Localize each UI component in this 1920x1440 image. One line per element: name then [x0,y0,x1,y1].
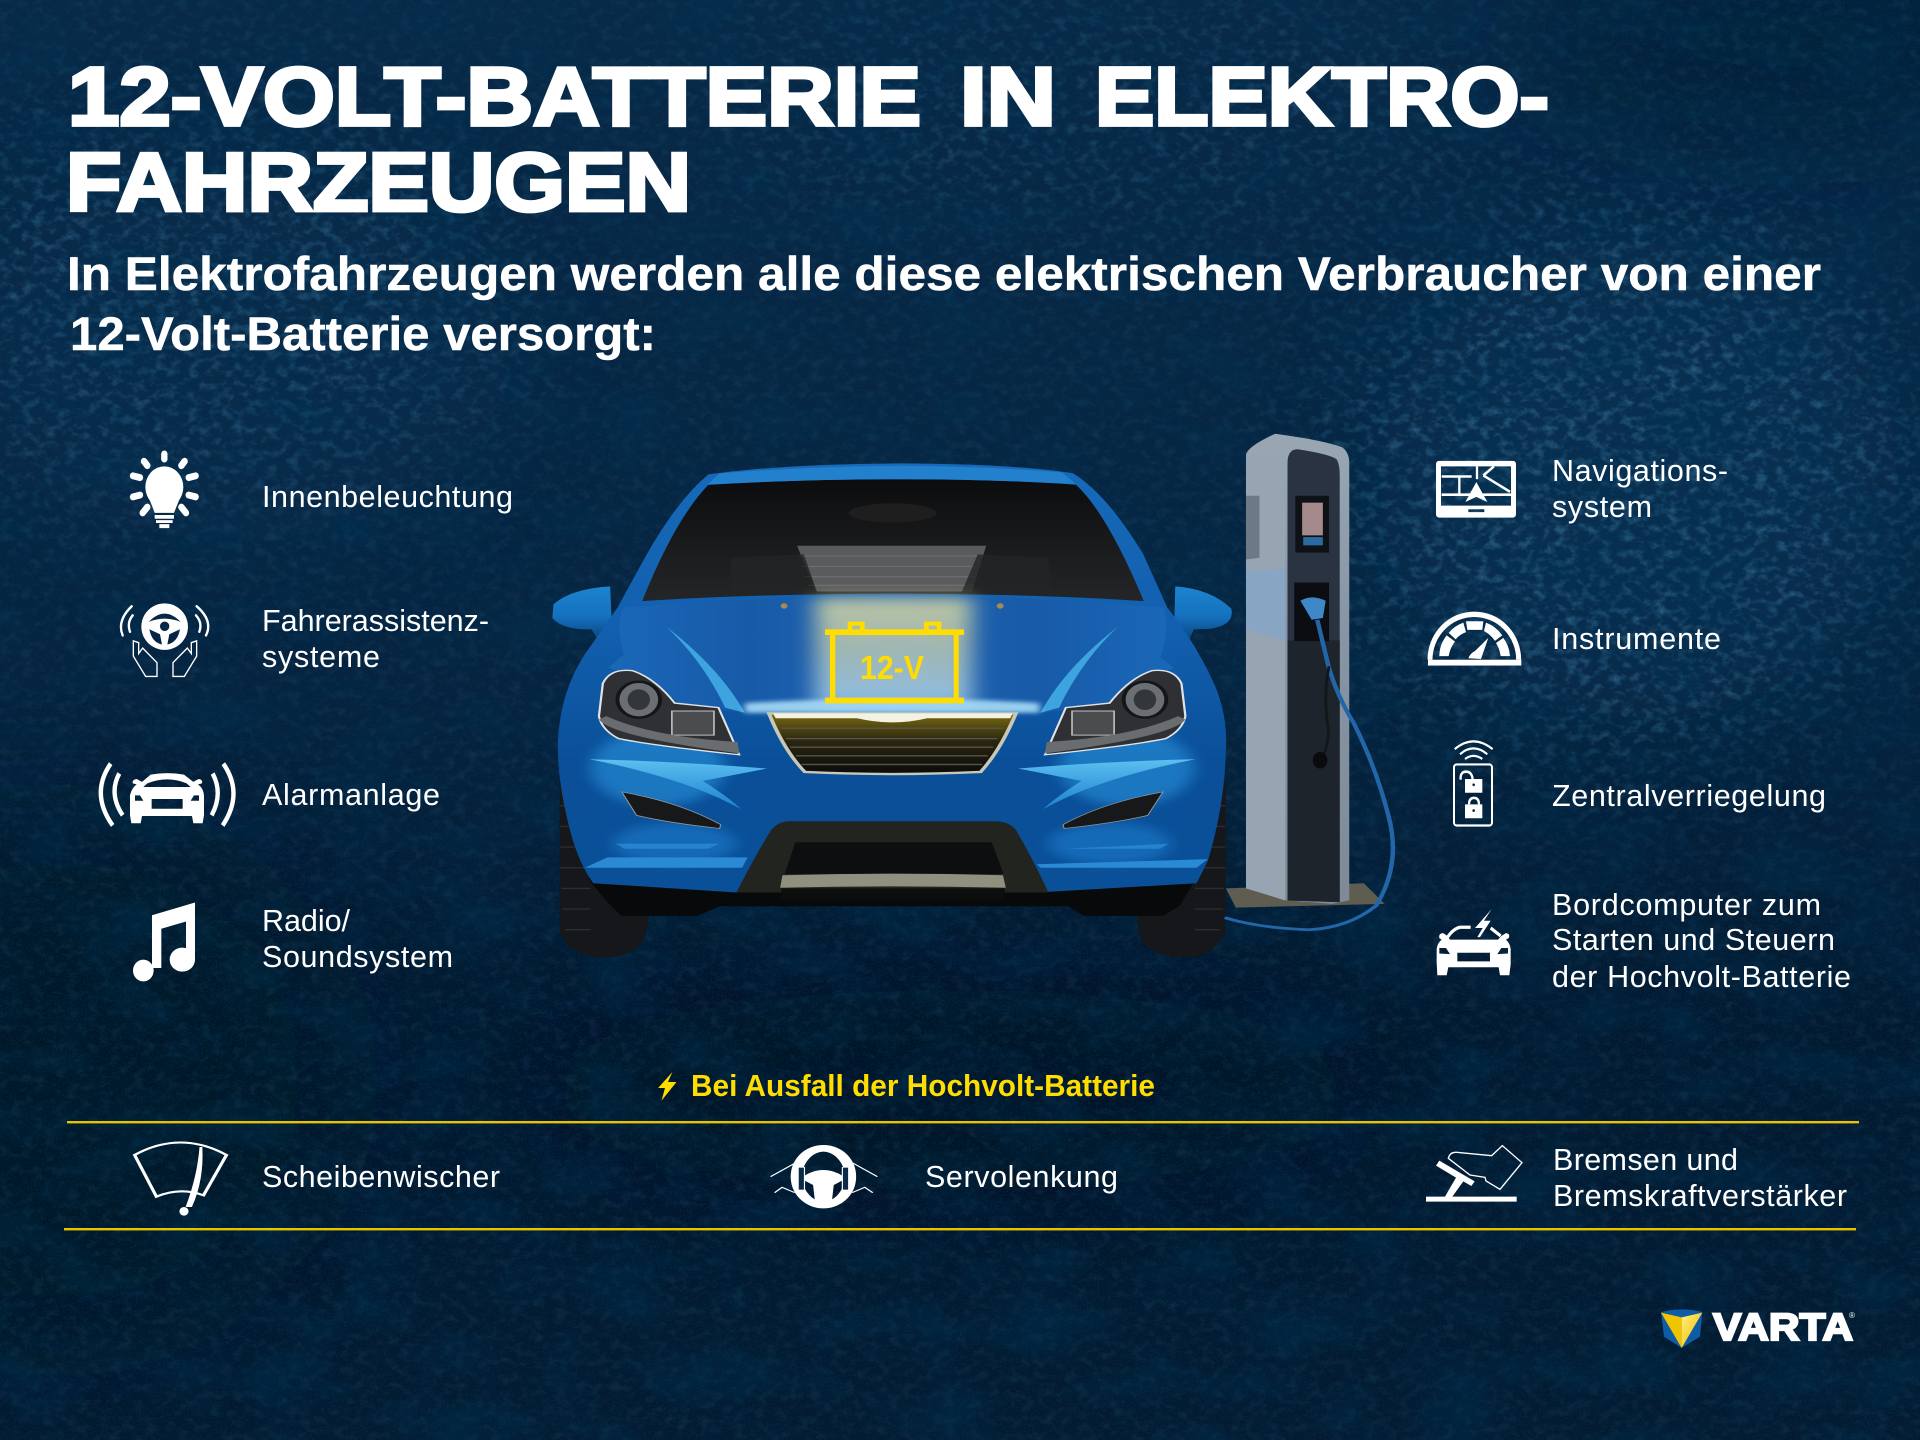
rear window and seats [797,546,986,592]
heading: failure of high-voltage battery: Bei Ausfall der Hochvolt-Batterie [691,1069,1155,1103]
label: Innenbeleuchtung: Innenbeleuchtung [262,480,513,514]
divider [67,1121,1859,1123]
label: Scheibenwischer: Scheibenwischer [262,1160,500,1194]
icon: music note [133,903,195,981]
windshield [642,479,1144,601]
divider [64,1228,1856,1230]
label: Zentralverriegelung: Zentralverriegelung [1552,779,1826,813]
wheels [560,782,1226,957]
body side sheen [591,730,725,806]
hood studs [781,603,787,609]
icon: power steering [771,1148,877,1205]
label: Servolenkung: Servolenkung [925,1160,1118,1194]
label: Bremsen und Bremskraftverstaerker [1553,1143,1847,1213]
label: Bremsen und Bremskraftverstaerker: Bremskraftverstärker [1553,1179,1847,1213]
logo wordmark: VARTA [1713,1307,1853,1349]
grille [769,713,1016,774]
roof highlight [707,466,1076,485]
logo shield [1661,1309,1702,1348]
title: 12-VOLT-BATTERIE [68,50,921,143]
subtitle: In Elektrofahrzeugen werden alle diese elektrischen Verbraucher von einer [67,247,1821,300]
icon: steering wheel with hands [121,603,208,676]
label: Bordcomputer [1552,888,1851,994]
icon: brake pedal with foot [1426,1146,1522,1202]
title [66,50,1549,228]
battery glow [815,597,972,706]
icon: car alarm [101,764,233,825]
label: Radio/Soundsystem: Soundsystem [262,940,453,974]
label: Radio/Soundsystem [262,904,453,974]
label: Fahrerassistenzsysteme: Fahrerassistenz- [262,604,489,638]
icon: light bulb [133,454,196,528]
icon: central locking remote [1454,741,1493,825]
hood [608,596,1174,713]
mirrors [552,586,612,642]
label: Alarmanlage: Alarmanlage [262,778,440,812]
label: Navigationssystem [1552,454,1728,524]
label: Radio/Soundsystem: Radio/ [262,904,351,938]
icon: windscreen wiper [135,1142,226,1216]
fog lights [622,792,721,828]
lower bumper [736,821,1048,893]
logo: VARTA [1661,1307,1855,1349]
icon: 12-V battery [825,622,964,703]
icon: car with lightning bolt [1437,909,1511,975]
label: Navigationssystem: Navigations- [1552,454,1728,488]
label: Navigationssystem: system [1552,490,1652,524]
label: Bremsen und Bremskraftverstaerker: Bremsen und [1553,1143,1738,1177]
registered mark: ® [1849,1311,1855,1320]
label: Bordcomputer: Bordcomputer zum [1552,888,1821,922]
icon: speedometer [1428,614,1521,666]
hood creases [666,627,1118,713]
label: Instrumente: Instrumente [1552,622,1721,656]
illustration: charging station [1225,434,1393,930]
label: Fahrerassistenzsysteme [262,604,489,674]
icon: navigation map [1436,461,1516,518]
icon: yellow lightning bolt [658,1072,676,1101]
title: IN [960,50,1056,143]
label: Fahrerassistenzsysteme: systeme [262,640,380,674]
illustration: blue car [552,463,1232,957]
headlights [599,670,739,755]
subtitle: 12-Volt-Batterie versorgt: [70,307,656,360]
underbody shadow [588,878,1197,916]
title: FAHRZEUGEN [66,136,691,228]
label: Bordcomputer: der Hochvolt-Batterie [1552,960,1851,994]
title: ELEKTRO- [1095,50,1549,143]
label: Bordcomputer: Starten und Steuern [1552,923,1835,957]
side highlights [589,759,767,809]
subtitle [67,247,1821,360]
car body [558,463,1226,893]
hood leading edge highlight [745,698,1039,713]
label: 12-V: 12-V [860,650,924,687]
